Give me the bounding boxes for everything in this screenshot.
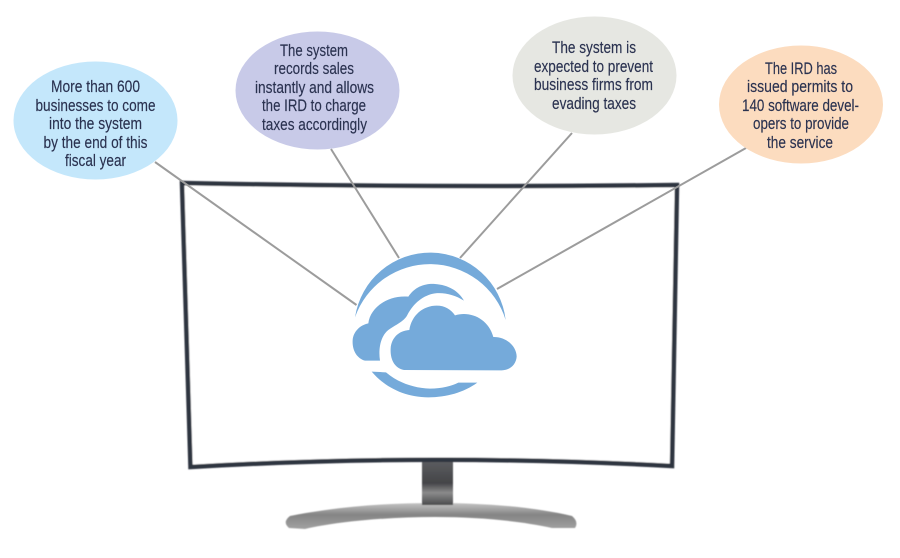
bubble 4 text — [742, 59, 859, 152]
bubble 1 text: businesses to come — [36, 96, 156, 115]
bubble 3 — [512, 16, 676, 134]
bubble 3 background — [512, 16, 676, 134]
bubble 3 text — [534, 38, 653, 113]
bubble 2 text — [255, 41, 374, 134]
connector: bubble 4 to cloud — [497, 148, 746, 289]
bubble 1 text: More than 600 — [51, 77, 140, 96]
bubble 2 background — [236, 32, 400, 150]
bubble 2 text: records sales — [274, 59, 354, 78]
bubble 3 text: expected to prevent — [534, 57, 653, 76]
icon: cloud — [353, 253, 517, 397]
bubble 2 — [236, 32, 400, 150]
bubble 2 text: The system — [280, 41, 348, 60]
bubble 4 text: issued permits to — [747, 77, 853, 96]
monitor screen frame — [182, 183, 677, 467]
connector: bubble 2 to cloud — [331, 149, 399, 258]
connector: bubble 3 to cloud — [460, 133, 572, 258]
bubble 1 — [14, 62, 178, 180]
bubble 2 text: the IRD to charge — [262, 96, 366, 115]
icon: top ring arc — [355, 253, 506, 320]
bubble 2 text: instantly and allows — [255, 78, 374, 97]
bubble 1 text: by the end of this — [44, 133, 148, 152]
connector: bubble 1 to cloud — [155, 162, 356, 305]
bubble 3 text: business firms from — [534, 75, 653, 94]
monitor stand base — [286, 503, 576, 529]
icon: back cloud — [353, 284, 464, 361]
monitor stand neck — [422, 461, 453, 505]
connector lines — [155, 133, 746, 305]
bubble 4 background — [719, 46, 883, 164]
bubble 4 text: 140 software devel- — [742, 96, 859, 115]
bubble 4 — [719, 46, 883, 164]
bubble 1 text: into the system — [49, 114, 142, 133]
bubble 3 text: The system is — [552, 38, 636, 57]
bubble 4 text: opers to provide — [753, 114, 849, 133]
bubble 1 background — [14, 62, 178, 180]
bubble 4 text: the service — [767, 133, 833, 152]
monitor — [182, 183, 677, 529]
bubble 1 text — [36, 77, 156, 170]
bubble 1 text: fiscal year — [65, 151, 126, 170]
bubble 3 text: evading taxes — [552, 94, 636, 113]
icon: front cloud — [391, 306, 517, 370]
icon: bottom ring arc — [372, 372, 477, 397]
bubble 4 text: The IRD has — [765, 59, 837, 78]
bubble 2 text: taxes accordingly — [262, 115, 367, 134]
